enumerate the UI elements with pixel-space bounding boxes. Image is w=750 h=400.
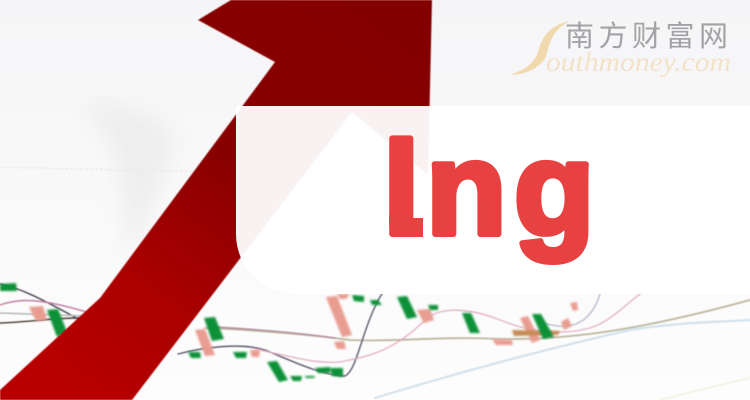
logo: southmoney	[510, 20, 733, 77]
title panel	[236, 106, 750, 294]
red arrow	[0, 0, 432, 400]
logo chinese name: 南方财富网	[565, 20, 733, 53]
candlesticks: green	[0, 283, 554, 382]
candlesticks: pink	[29, 294, 578, 357]
title text: lng	[383, 115, 595, 262]
panel background	[236, 106, 750, 294]
stock chart lines	[0, 284, 750, 400]
logo latin name: outhmoney.com	[546, 47, 731, 77]
logo swoosh	[510, 21, 570, 75]
